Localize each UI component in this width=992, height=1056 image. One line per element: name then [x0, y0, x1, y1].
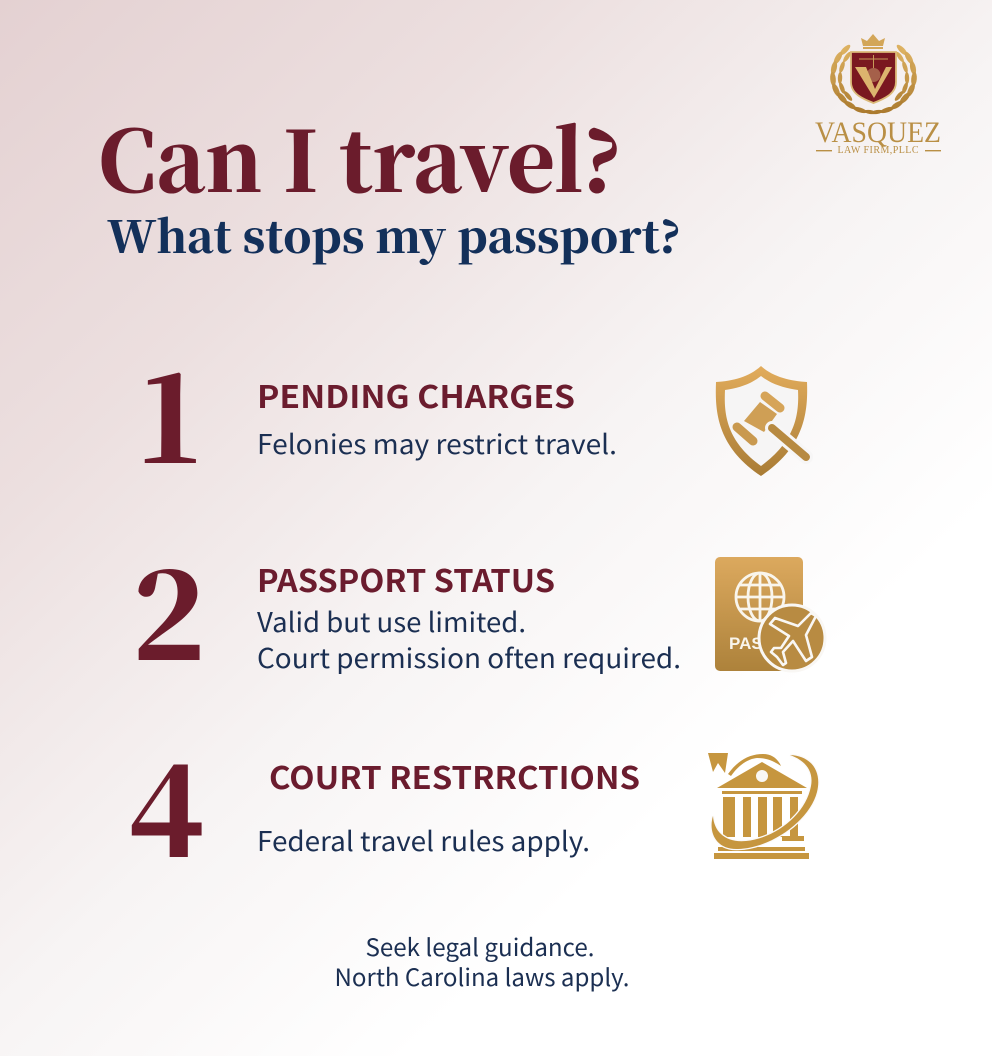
icon: shield: [851, 52, 896, 103]
description line 2: Court permission often required.: [257, 637, 681, 676]
item 2: passport status: [132, 518, 825, 696]
description line 1: Valid but use limited.: [257, 601, 526, 640]
number 4: 4: [128, 713, 206, 891]
firm subtitle: LAW FIRM,PLLC: [838, 145, 919, 156]
heading: COURT RESTRRCTIONS: [269, 753, 640, 798]
icon: scales ornament: [859, 55, 888, 82]
icon: passport with plane: PASS: [729, 634, 774, 653]
heading: PASSPORT STATUS: [257, 556, 555, 601]
logo: Vasquez Law Firm: [815, 34, 941, 156]
closing line 2: North Carolina laws apply.: [334, 958, 630, 993]
icon: laurel wreath: [830, 43, 917, 115]
closing note: [334, 928, 630, 993]
description: Federal travel rules apply.: [257, 820, 590, 859]
icon: passport with plane: [715, 557, 825, 671]
number 2: 2: [132, 518, 206, 696]
icon: shield with gavel: [716, 366, 807, 476]
heading: PENDING CHARGES: [257, 372, 575, 417]
closing line 1: Seek legal guidance.: [366, 928, 594, 963]
icon: crown: [861, 34, 885, 49]
item 1: pending charges: [135, 321, 807, 499]
firm name: VASQUEZ: [815, 116, 941, 149]
item 3: court restrictions: [128, 713, 818, 891]
description: Felonies may restrict travel.: [257, 423, 617, 462]
icon: courthouse with orbit: [708, 753, 818, 859]
number 1: 1: [135, 321, 205, 499]
icon: letter V: [855, 67, 892, 98]
subtitle: What stops my passport?: [107, 202, 681, 266]
title: Can I travel?: [98, 96, 622, 217]
